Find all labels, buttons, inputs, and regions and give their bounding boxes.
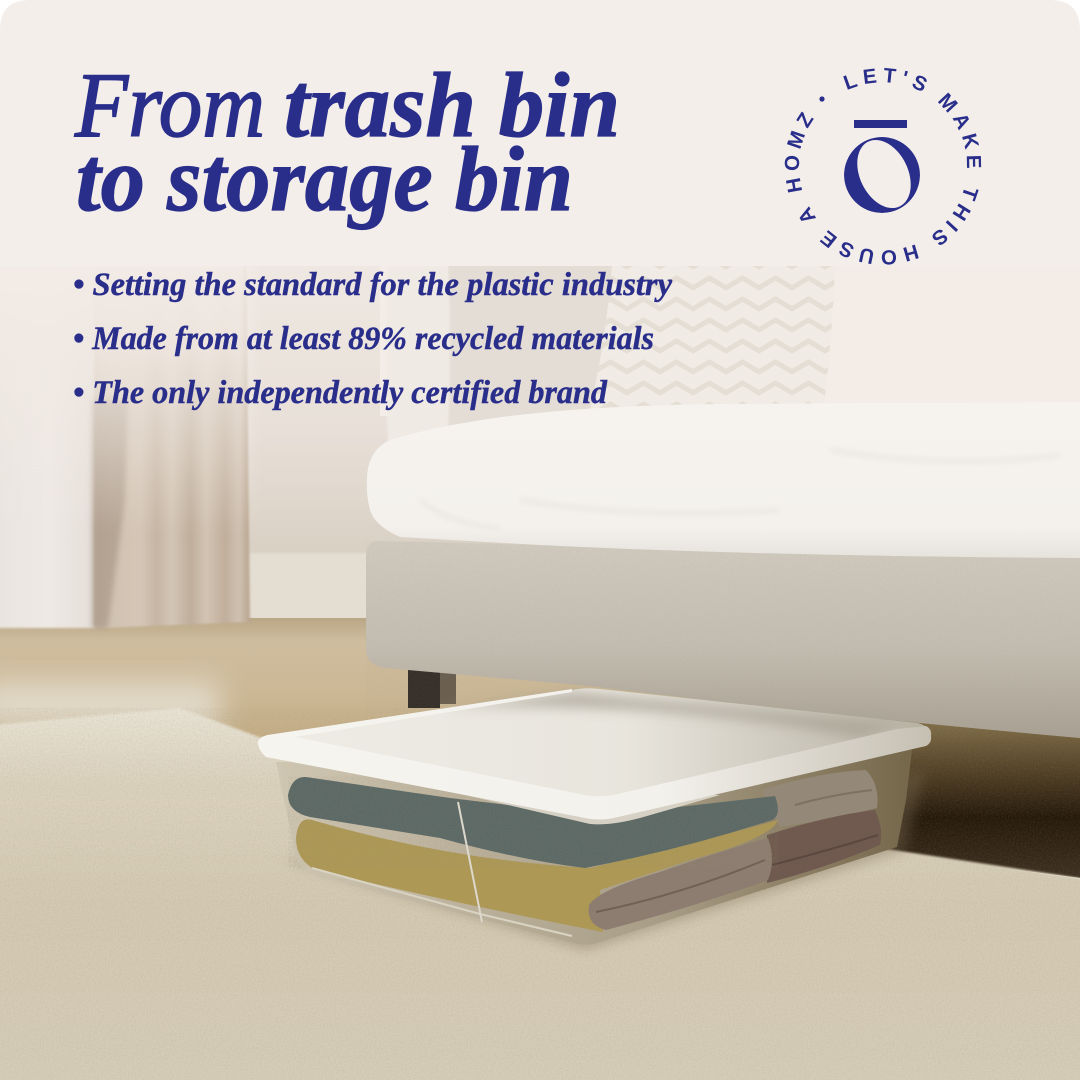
upholstered bed base xyxy=(366,541,1080,738)
bed leg xyxy=(408,660,456,708)
title: From xyxy=(74,54,265,156)
mauve folded fabric at back xyxy=(767,810,881,883)
white lid top xyxy=(258,688,930,811)
beige carpet rug xyxy=(0,708,1080,1080)
under-lid clear rim xyxy=(452,786,720,824)
grey knit sweater xyxy=(288,777,778,868)
mustard folded blanket xyxy=(296,819,778,932)
bin body xyxy=(276,750,912,944)
taupe rolled fabric xyxy=(589,838,772,930)
ring slogan text: LET'S MAKE THIS HOUSE A HOMZ xyxy=(784,68,982,265)
lid shadow under bed frame xyxy=(440,692,900,738)
lid front rim xyxy=(258,689,931,820)
bullet: plastic industry: • Setting the standard for the plastic industry xyxy=(73,267,672,303)
white mattress xyxy=(367,402,1080,558)
box contact shadow xyxy=(285,770,925,950)
badge logo xyxy=(784,68,982,265)
ring dot xyxy=(819,96,825,102)
logo macron bar xyxy=(854,120,907,128)
curtains at left window xyxy=(0,250,252,628)
header panel xyxy=(0,0,1080,266)
clear strap xyxy=(458,802,482,922)
bullet list xyxy=(73,267,672,411)
bullet: recycled materials: • Made from at least 89% recycled materials xyxy=(73,321,654,357)
title: to storage bin xyxy=(76,128,573,230)
pillow with chevron pattern xyxy=(590,266,835,410)
pillow left, blurred xyxy=(386,266,614,442)
room background: wall xyxy=(0,266,1080,626)
cream folded fabric at back xyxy=(762,770,878,827)
logo o mark xyxy=(844,137,920,213)
shadow area under bed xyxy=(880,718,1080,878)
transparent storage bin with folded clothes xyxy=(258,688,931,944)
bullet: certified brand: • The only independently certified brand xyxy=(73,375,607,411)
wooden floor xyxy=(0,618,1080,748)
title: trash bin xyxy=(284,54,620,156)
title xyxy=(74,54,620,230)
bin bottom rim xyxy=(312,868,572,936)
